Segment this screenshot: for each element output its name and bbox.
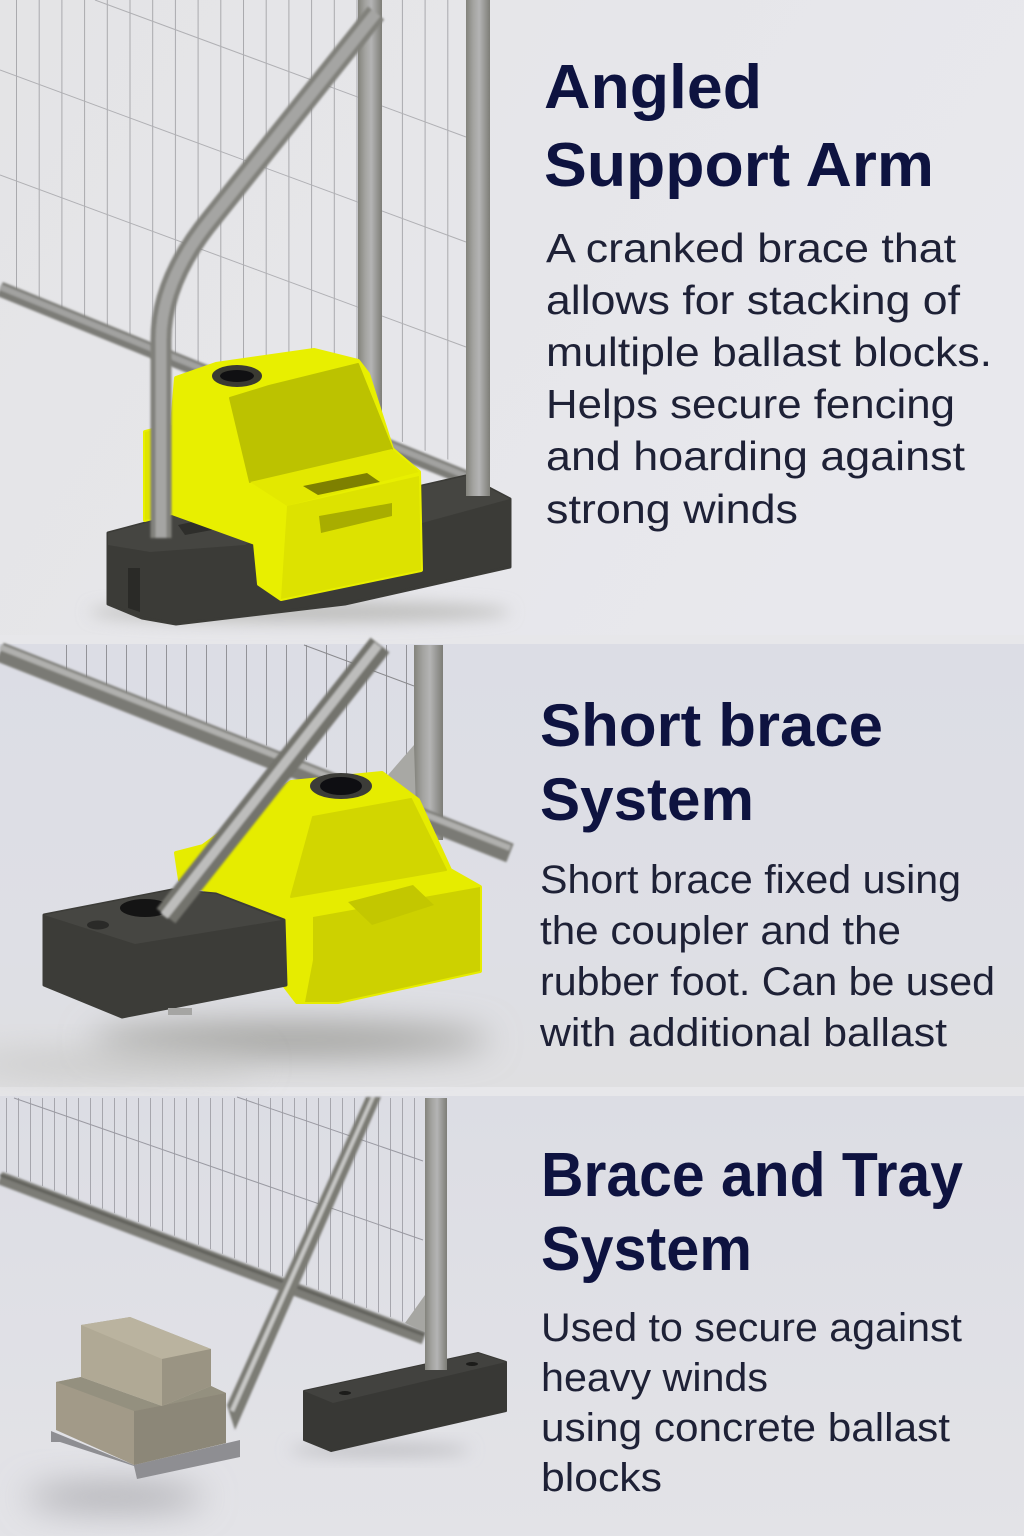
description: multiple ballast blocks. [546,329,992,375]
illustration: brace, tray and concrete blocks [0,1097,506,1509]
description: with additional ballast [539,1011,947,1055]
description: Helps secure fencing [546,381,955,427]
short brace tube [164,645,380,916]
angled support arm tube [161,13,376,538]
description: allows for stacking of [546,277,961,323]
description: heavy winds [541,1356,768,1400]
description: Used to secure against [541,1306,962,1350]
ballast base [108,476,510,624]
heading: Short brace [540,692,883,759]
description: strong winds [546,486,798,532]
panel: angled support arm [0,0,1024,635]
lower rail tube [0,647,510,853]
description: blocks [541,1456,662,1500]
description: using concrete ballast [541,1406,950,1450]
dark base [44,890,286,1017]
description: A cranked brace that [546,225,957,271]
description: rubber foot. Can be used [540,960,995,1004]
panel: brace and tray system [0,1096,1024,1536]
heading: Brace and Tray [541,1141,963,1210]
illustration: fence with angled arm and yellow ballast [0,0,510,624]
heading: System [541,1215,752,1284]
concrete blocks [56,1317,226,1465]
description: and hoarding against [546,433,966,479]
yellow block [145,350,421,599]
tray [51,1431,240,1479]
lower rail tube [0,1175,424,1338]
yellow block [176,773,480,1002]
black rubber foot [304,1353,506,1451]
heading: Support Arm [544,131,934,200]
description: the coupler and the [540,909,901,953]
long brace tube [227,1097,381,1430]
heading: Angled [544,53,762,122]
illustration: short brace with yellow ballast [0,645,510,1074]
description: Short brace fixed using [540,858,961,902]
heading: System [540,766,754,833]
panel: short brace system [0,644,1024,1087]
